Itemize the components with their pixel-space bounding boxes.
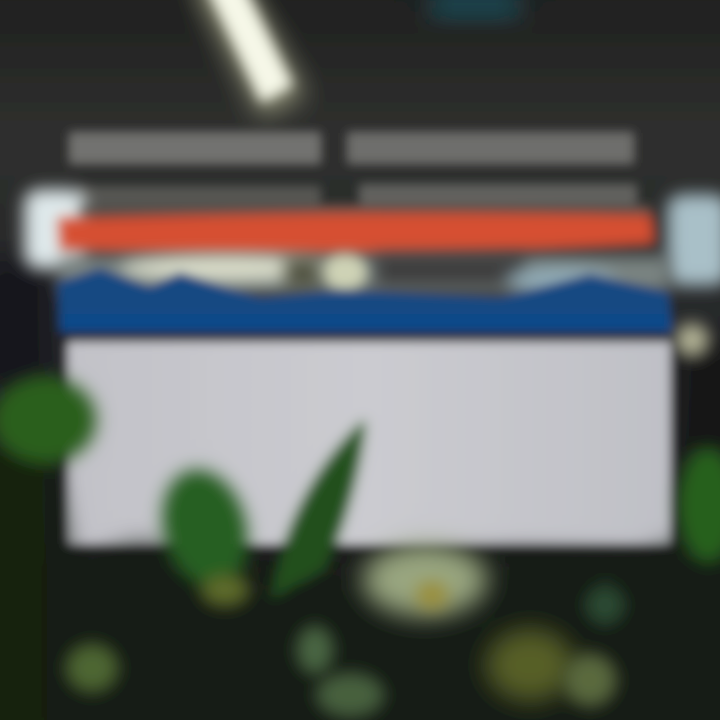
white text panel bbox=[68, 342, 670, 544]
foliage: dark lower area bbox=[0, 450, 720, 720]
pale flowers and highlights bbox=[66, 544, 625, 717]
banner left and right edges bbox=[25, 190, 720, 356]
blue band bbox=[58, 268, 672, 332]
mountain landscape band bbox=[60, 254, 670, 293]
leaf: centre left bbox=[149, 459, 261, 597]
leaf: right edge bbox=[678, 447, 720, 563]
ceiling light tube bbox=[190, 0, 305, 118]
blurred title text bbox=[70, 133, 636, 205]
leaf: tall centre blade bbox=[270, 420, 365, 600]
banner top strip bbox=[80, 206, 650, 216]
orange band bbox=[58, 212, 655, 255]
leaf: upper left bbox=[0, 376, 97, 464]
